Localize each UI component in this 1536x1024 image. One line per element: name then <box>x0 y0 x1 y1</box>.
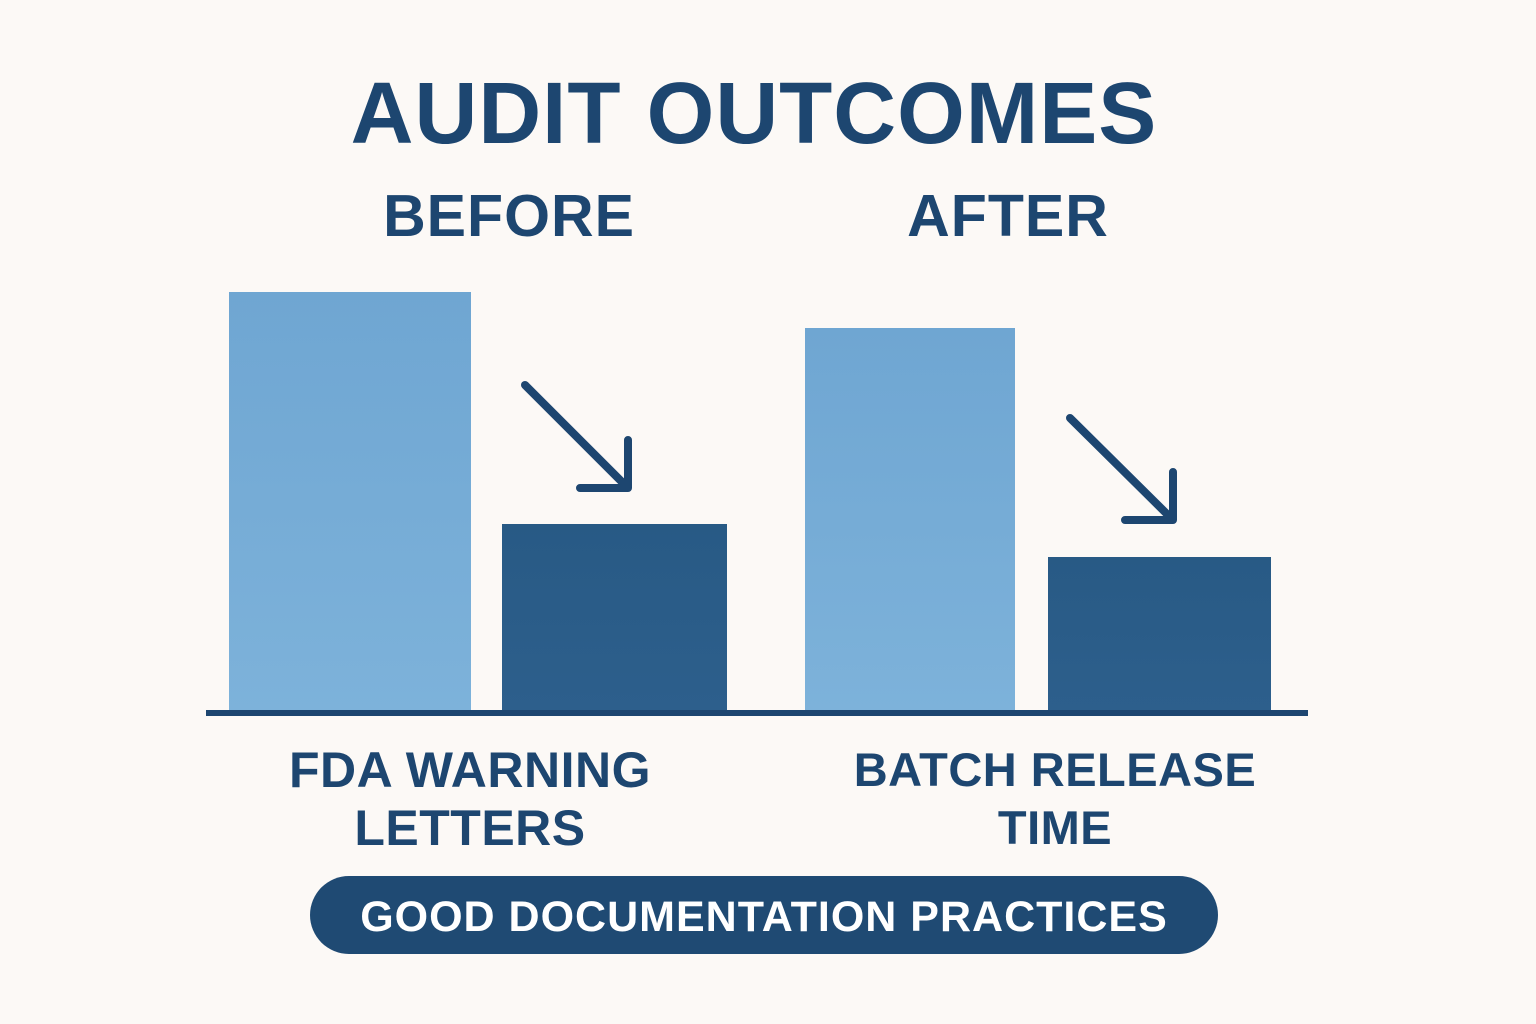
pill: good documentation practices: GOOD DOCUMENTATION PRACTICES <box>360 893 1168 941</box>
baseline <box>206 710 1308 716</box>
bar: batch after <box>1048 557 1271 712</box>
label: FDA warning letters: FDA WARNING <box>289 742 651 798</box>
heading: before: BEFORE <box>383 183 635 249</box>
title: AUDIT OUTCOMES <box>351 65 1157 162</box>
heading: after: AFTER <box>907 183 1109 249</box>
bar: FDA after <box>502 524 727 712</box>
pill: good documentation practices <box>310 876 1218 954</box>
arrow: decrease batch <box>1070 418 1173 520</box>
arrow: decrease FDA <box>525 385 628 488</box>
bar: FDA before <box>229 292 471 712</box>
label: batch release time: BATCH RELEASE <box>854 743 1256 796</box>
label: batch release time: TIME <box>998 801 1112 854</box>
label: batch release time <box>854 743 1256 854</box>
label: FDA warning letters: LETTERS <box>354 800 586 856</box>
bar: batch before <box>805 328 1015 712</box>
label: FDA warning letters <box>289 742 651 856</box>
